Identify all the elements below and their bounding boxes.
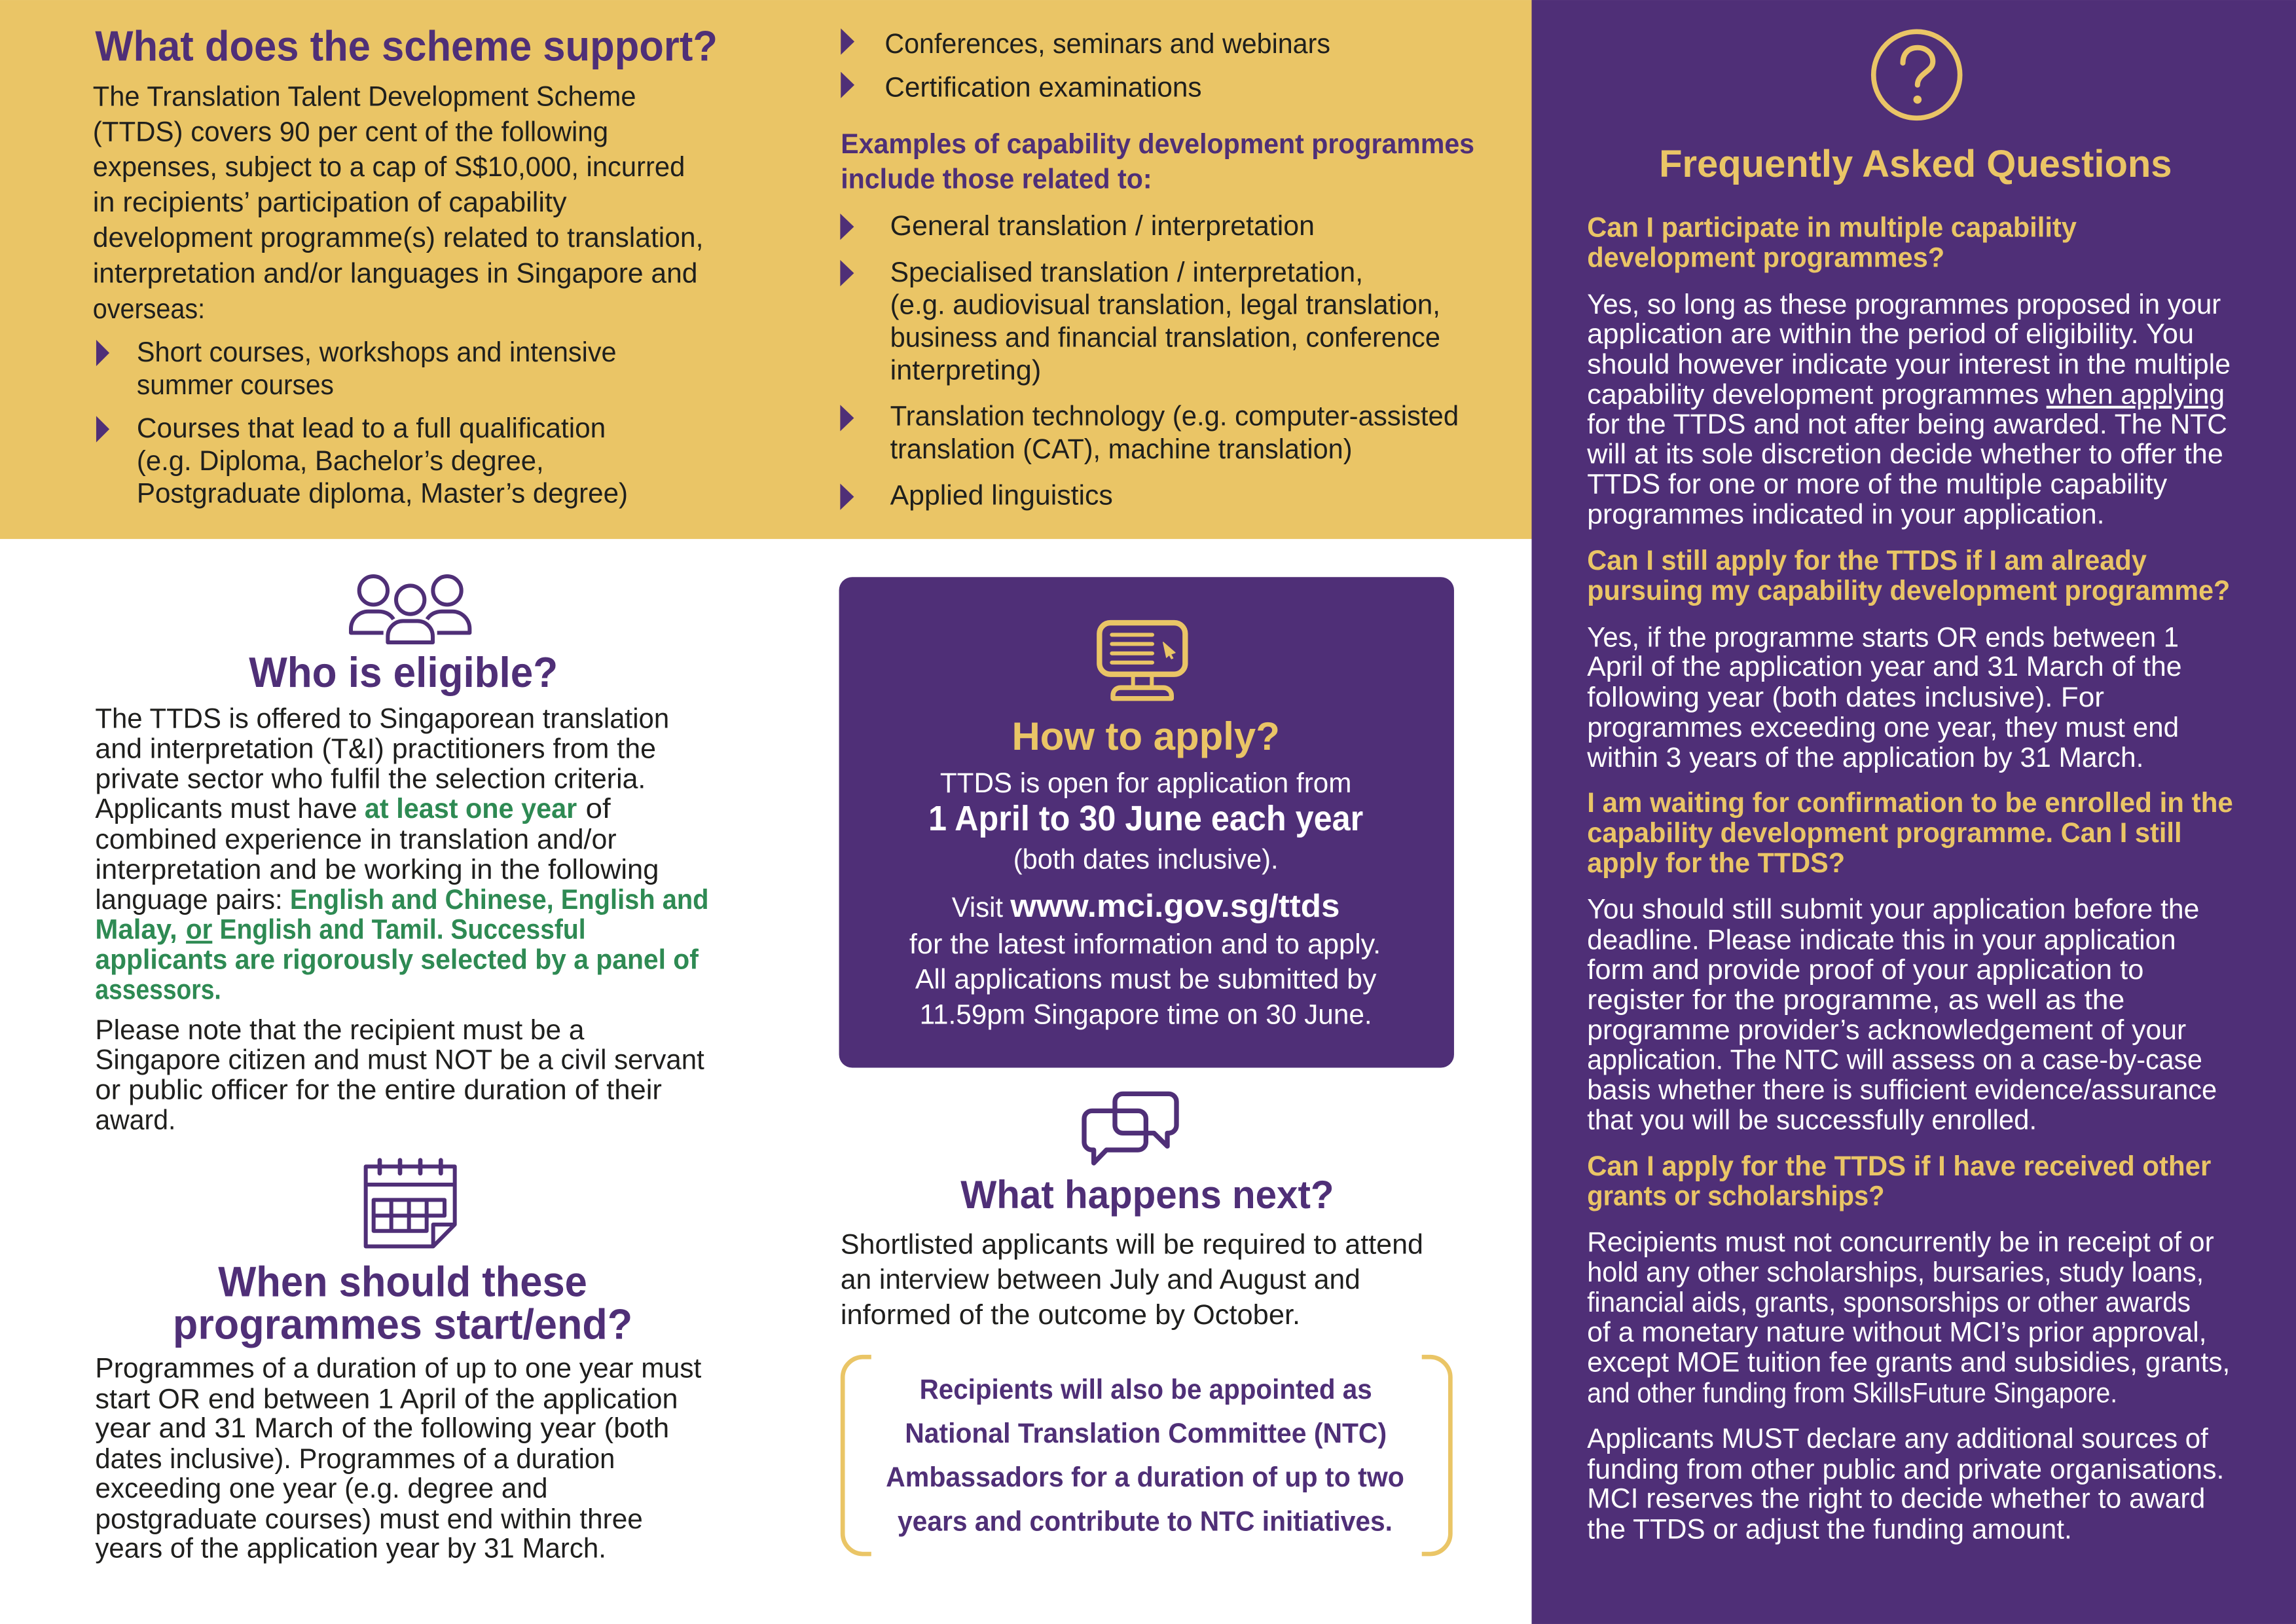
faq question 4: grants or scholarships? xyxy=(1587,1181,1885,1212)
subheading: examples of capability development programmes: Examples of capability development programmes xyxy=(841,129,1474,160)
faq answer 4: and other funding from SkillsFuture Singapore. xyxy=(1587,1378,2117,1409)
faq answer 3: programme provider’s acknowledgement of your xyxy=(1587,1015,2186,1046)
faq answer 3 xyxy=(1587,894,2217,1135)
faq note: additional funding declaration: MCI reserves the right to decide whether to award xyxy=(1587,1484,2205,1515)
text block: programme timing: start OR end between 1 April of the application xyxy=(95,1384,678,1415)
faq question 1 xyxy=(1587,213,2077,274)
faq note: additional funding declaration: the TTDS or adjust the funding amount. xyxy=(1587,1515,2072,1545)
faq question 1: development programmes? xyxy=(1587,243,1944,274)
faq question 4 xyxy=(1587,1151,2211,1212)
heading: when should these programmes start or end xyxy=(173,1257,632,1348)
text block: scheme introduction: development programme(s) related to translation, xyxy=(93,223,703,253)
panel: frequently asked questions xyxy=(1531,0,2296,1624)
bullet list: programme examples: Applied linguistics xyxy=(890,480,1113,511)
faq question 2: pursuing my capability development programme? xyxy=(1587,576,2230,606)
icon: calendar xyxy=(366,1160,455,1246)
text block: interview and outcome: informed of the outcome by October. xyxy=(841,1300,1300,1331)
bullet list: conferences and certification: Certification examinations xyxy=(884,73,1202,103)
text block: scheme introduction: (TTDS) covers 90 per cent of the following xyxy=(93,117,608,147)
heading: who is eligible: Who is eligible? xyxy=(249,648,558,696)
faq note: additional funding declaration xyxy=(1587,1424,2224,1545)
text block: eligibility criteria: interpretation and be working in the following xyxy=(95,855,659,885)
text block: programme timing: years of the application year by 31 March. xyxy=(95,1534,606,1564)
text block: eligibility criteria: language pairs: xyxy=(95,885,283,915)
text block: website and deadline: for the latest information and to apply. xyxy=(909,929,1381,960)
faq answer 3: that you will be successfully enrolled. xyxy=(1587,1105,2037,1135)
text block: website and deadline: 11.59pm Singapore time on 30 June. xyxy=(920,999,1372,1030)
faq answer 2: April of the application year and 31 March of the xyxy=(1587,652,2182,682)
callout: national translation committee ambassadors: Recipients will also be appointed as xyxy=(920,1375,1372,1405)
bullet list: programme examples: translation (CAT), machine translation) xyxy=(890,434,1353,465)
bullet list: eligible course types: Short courses, workshops and intensive xyxy=(137,337,617,368)
text block: application period: (both dates inclusive). xyxy=(1013,844,1279,875)
text block: citizenship note: Please note that the recipient must be a xyxy=(95,1015,585,1046)
text block: eligibility criteria: at least one year xyxy=(365,794,577,824)
faq answer 3: register for the programme, as well as the xyxy=(1587,985,2124,1016)
text block: eligibility criteria: The TTDS is offered to Singaporean translation xyxy=(95,704,669,735)
faq question 4: Can I apply for the TTDS if I have received other xyxy=(1587,1151,2211,1182)
bullet list: programme examples: Specialised translation / interpretation, xyxy=(890,257,1363,288)
text block: website and deadline: www.mci.gov.sg/ttds xyxy=(1010,888,1339,924)
faq question 3 xyxy=(1587,788,2233,879)
icon: computer monitor with cursor xyxy=(1099,623,1185,699)
faq question 2: Can I still apply for the TTDS if I am already xyxy=(1587,545,2147,576)
faq note: additional funding declaration: Applicants MUST declare any additional sources of xyxy=(1587,1424,2208,1454)
text block: application period: 1 April to 30 June each year xyxy=(928,799,1363,838)
faq question 3: apply for the TTDS? xyxy=(1587,848,1845,879)
text block: scheme introduction xyxy=(93,82,703,325)
text block: programme timing: postgraduate courses) must end within three xyxy=(95,1504,643,1535)
icon: speech bubbles xyxy=(1084,1094,1176,1163)
text block: eligibility criteria: combined experience in translation and/or xyxy=(95,824,617,855)
faq question 3: capability development programme. Can I still xyxy=(1587,818,2182,849)
faq answer 2: following year (both dates inclusive). For xyxy=(1587,682,2104,713)
faq answer 1: when applying xyxy=(2046,380,2225,411)
text block: scheme introduction: in recipients’ participation of capability xyxy=(93,187,567,218)
text block: programme timing: dates inclusive). Programmes of a duration xyxy=(95,1444,615,1475)
callout: national translation committee ambassadors: Ambassadors for a duration of up to two xyxy=(886,1462,1404,1493)
text block: eligibility criteria xyxy=(95,704,709,1005)
text block: programme timing: exceeding one year (e.g. degree and xyxy=(95,1473,547,1504)
faq answer 3: deadline. Please indicate this in your application xyxy=(1587,925,2176,955)
text block: eligibility criteria: or xyxy=(186,915,212,946)
faq answer 4: hold any other scholarships, bursaries, study loans, xyxy=(1587,1257,2204,1288)
faq answer 4: of a monetary nature without MCI’s prior approval, xyxy=(1587,1318,2207,1348)
text block: interview and outcome xyxy=(841,1230,1423,1331)
faq answer 1 xyxy=(1586,289,2231,530)
text block: eligibility criteria: and interpretation (T&I) practitioners from the xyxy=(95,733,656,764)
faq answer 3: basis whether there is sufficient evidence/assurance xyxy=(1587,1075,2217,1106)
heading: when should these programmes start or end: programmes start/end? xyxy=(173,1300,632,1348)
text block: scheme introduction: overseas: xyxy=(93,294,205,325)
bullet list: eligible course types xyxy=(96,337,628,509)
text block: eligibility criteria: of xyxy=(586,794,611,824)
faq answer 1: for the TTDS and not after being awarded. The NTC xyxy=(1587,409,2227,440)
icon: three people xyxy=(351,576,469,642)
text block: application period xyxy=(928,768,1363,875)
text block: scheme introduction: The Translation Talent Development Scheme xyxy=(93,82,636,113)
text block: website and deadline: Visit xyxy=(952,893,1003,923)
faq answer 3: form and provide proof of your application to xyxy=(1587,955,2143,986)
text block: scheme introduction: interpretation and/or languages in Singapore and xyxy=(93,258,698,289)
callout: national translation committee ambassadors: years and contribute to NTC initiatives. xyxy=(898,1506,1393,1537)
bullet list: programme examples: interpreting) xyxy=(890,356,1041,386)
faq answer 2: Yes, if the programme starts OR ends between 1 xyxy=(1587,622,2179,653)
callout: national translation committee ambassadors xyxy=(843,1357,1450,1554)
text block: citizenship note: or public officer for the entire duration of their xyxy=(95,1075,662,1106)
subheading: examples of capability development programmes: include those related to: xyxy=(841,164,1152,194)
text block: citizenship note: Singapore citizen and must NOT be a civil servant xyxy=(95,1045,704,1076)
faq answer 1: Yes, so long as these programmes proposed in your xyxy=(1587,289,2221,320)
text block: application period: TTDS is open for application from xyxy=(940,768,1351,799)
heading: when should these programmes start or end: When should these xyxy=(218,1257,587,1305)
faq answer 1: application are within the period of eligibility. You xyxy=(1587,319,2194,350)
faq answer 2: programmes exceeding one year, they must end xyxy=(1587,712,2179,743)
text block: scheme introduction: expenses, subject to a cap of S$10,000, incurred xyxy=(93,152,685,183)
faq answer 4 xyxy=(1587,1227,2230,1409)
faq question 1: Can I participate in multiple capability xyxy=(1587,213,2077,244)
text block: programme timing xyxy=(95,1354,702,1564)
faq answer 2: within 3 years of the application by 31 March. xyxy=(1586,743,2143,773)
faq question 2 xyxy=(1587,545,2230,606)
callout: national translation committee ambassadors: National Translation Committee (NTC) xyxy=(905,1418,1387,1449)
text block: eligibility criteria: Applicants must have xyxy=(95,794,357,824)
faq answer 1: TTDS for one or more of the multiple capability xyxy=(1587,469,2168,500)
faq answer 1: will at its sole discretion decide whether to offer the xyxy=(1586,439,2223,470)
text block: interview and outcome: Shortlisted applicants will be required to attend xyxy=(841,1230,1423,1261)
text block: interview and outcome: an interview between July and August and xyxy=(841,1264,1360,1295)
faq answer 4: Recipients must not concurrently be in receipt of or xyxy=(1587,1227,2214,1258)
faq answer 1: should however indicate your interest in the multiple xyxy=(1587,350,2231,380)
text block: programme timing: year and 31 March of the following year (both xyxy=(95,1413,669,1444)
text block: website and deadline xyxy=(909,888,1381,1030)
bullet list: eligible course types: Postgraduate diploma, Master’s degree) xyxy=(137,479,628,509)
bullet list: conferences and certification xyxy=(841,28,1330,103)
heading: frequently asked questions: Frequently Asked Questions xyxy=(1659,143,2172,185)
heading: what does the scheme support: What does the scheme support? xyxy=(95,22,718,70)
panel: how to apply xyxy=(839,577,1454,1068)
bullet list: programme examples: General translation / interpretation xyxy=(890,211,1315,242)
faq answer 3: application. The NTC will assess on a case-by-case xyxy=(1587,1045,2202,1076)
faq answer 4: financial aids, grants, sponsorships or other awards xyxy=(1587,1287,2191,1318)
faq question 3: I am waiting for confirmation to be enrolled in the xyxy=(1587,788,2233,819)
faq note: additional funding declaration: funding from other public and private organisations. xyxy=(1587,1454,2224,1485)
faq answer 3: You should still submit your application before the xyxy=(1587,894,2199,925)
bullet list: conferences and certification: Conferences, seminars and webinars xyxy=(884,29,1330,60)
text block: eligibility criteria: Malay, xyxy=(95,915,177,946)
text block: eligibility criteria: English and Chinese, English and xyxy=(290,885,709,915)
text block: eligibility criteria: assessors. xyxy=(95,974,221,1005)
bullet list: eligible course types: (e.g. Diploma, Bachelor’s degree, xyxy=(137,446,544,477)
text block: eligibility criteria: English and Tamil. Successful xyxy=(219,915,586,946)
text block: eligibility criteria: private sector who fulfil the selection criteria. xyxy=(95,764,646,794)
text block: website and deadline: All applications must be submitted by xyxy=(915,965,1377,995)
bullet list: eligible course types: Courses that lead to a full qualification xyxy=(137,413,606,444)
faq answer 2 xyxy=(1586,622,2182,773)
text block: citizenship note xyxy=(95,1015,704,1135)
subheading: examples of capability development programmes xyxy=(841,129,1474,194)
text block: programme timing: Programmes of a duration of up to one year must xyxy=(95,1354,702,1384)
bullet list: eligible course types: summer courses xyxy=(137,370,334,401)
text block: eligibility criteria: applicants are rigorously selected by a panel of xyxy=(95,945,699,976)
bullet list: programme examples xyxy=(840,211,1459,511)
panel: what does the scheme support xyxy=(0,0,1531,539)
bullet list: programme examples: business and financial translation, conference xyxy=(890,322,1440,353)
text block: citizenship note: award. xyxy=(95,1105,175,1135)
icon: question mark in circle xyxy=(1874,31,1960,118)
faq answer 4: except MOE tuition fee grants and subsidies, grants, xyxy=(1587,1348,2230,1378)
bullet list: programme examples: (e.g. audiovisual translation, legal translation, xyxy=(890,290,1440,321)
faq answer 1: programmes indicated in your application. xyxy=(1587,499,2104,530)
bullet list: programme examples: Translation technology (e.g. computer-assisted xyxy=(890,401,1459,432)
faq answer 1: capability development programmes xyxy=(1587,380,2039,411)
heading: what happens next: What happens next? xyxy=(960,1172,1334,1217)
heading: how to apply: How to apply? xyxy=(1011,714,1280,758)
